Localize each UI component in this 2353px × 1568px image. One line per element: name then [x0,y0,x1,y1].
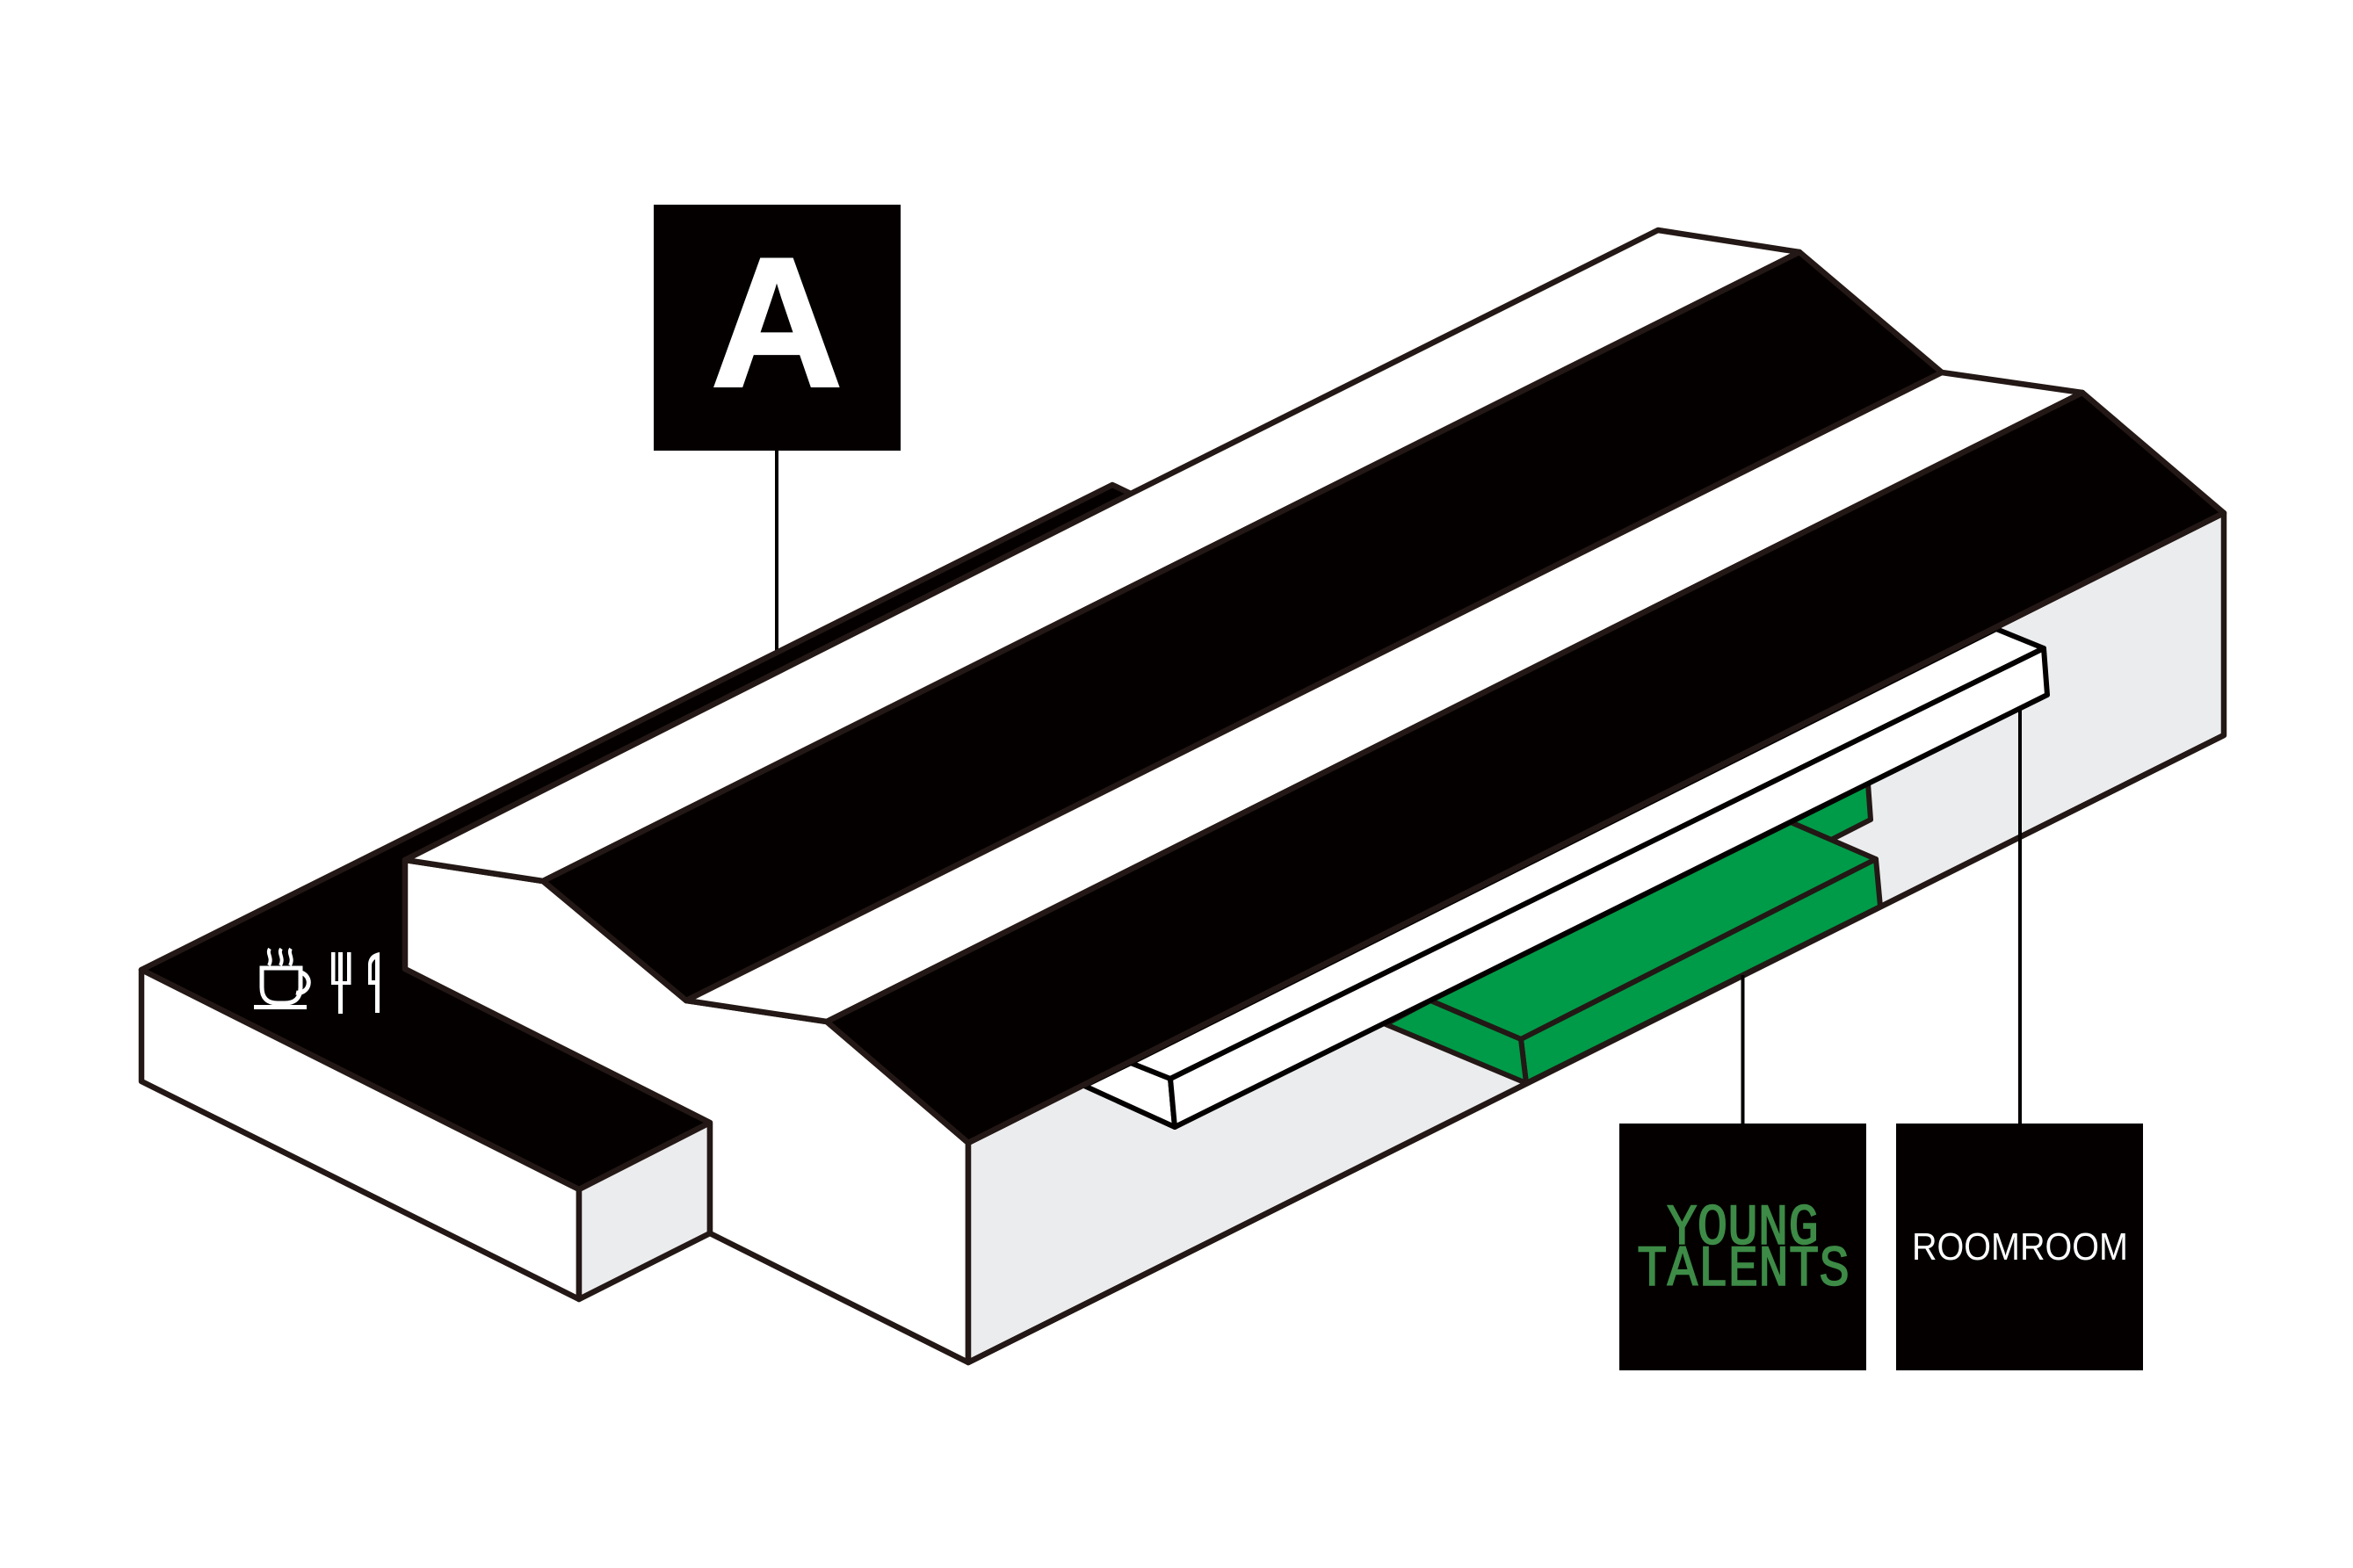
icon: knife [368,952,380,1013]
label box Roomroom [1896,1124,2143,1370]
icon: fork [331,952,351,1014]
label box Young Talents [1619,1124,1866,1370]
cafe right wall [579,1123,710,1299]
canopy front face [1170,648,2047,1127]
building [141,230,2224,1362]
white roof band rear [405,230,1799,881]
wall base redraw [968,735,2224,1362]
black roof band front [827,393,2224,1143]
cafe left wall [141,970,579,1299]
green rear section [1791,784,1871,840]
white Roomroom canopy volume [1084,629,2047,1127]
roof edge redraw [968,513,2224,1143]
canopy end face [1084,1063,1175,1127]
green end face [1386,1001,1526,1083]
connector: label A to roof [775,448,778,652]
Roomroom text: ROOMROOM [1912,1225,2128,1268]
cup body [262,968,300,1003]
label box A [654,205,901,451]
green Young Talents volume [1386,784,1880,1083]
black roof band rear [543,252,1942,1001]
saucer [254,1005,307,1009]
steam [269,949,292,965]
cup handle [296,972,308,993]
canopy top face [1131,629,2044,1079]
green top face [1430,822,1876,1039]
cafe roof [141,485,1131,1189]
white roof band front [686,372,2082,1022]
long side wall [968,513,2224,1362]
connector: Roomroom [2018,710,2022,1126]
Young text: YOUNG [1667,1196,1819,1261]
Talents text: TALENTS [1637,1237,1850,1303]
letter A: A [711,220,843,425]
front gable wall [405,860,968,1362]
connector: Young Talents [1741,975,1745,1126]
green front face [1521,859,1880,1083]
icon: coffee cup [254,949,308,1007]
